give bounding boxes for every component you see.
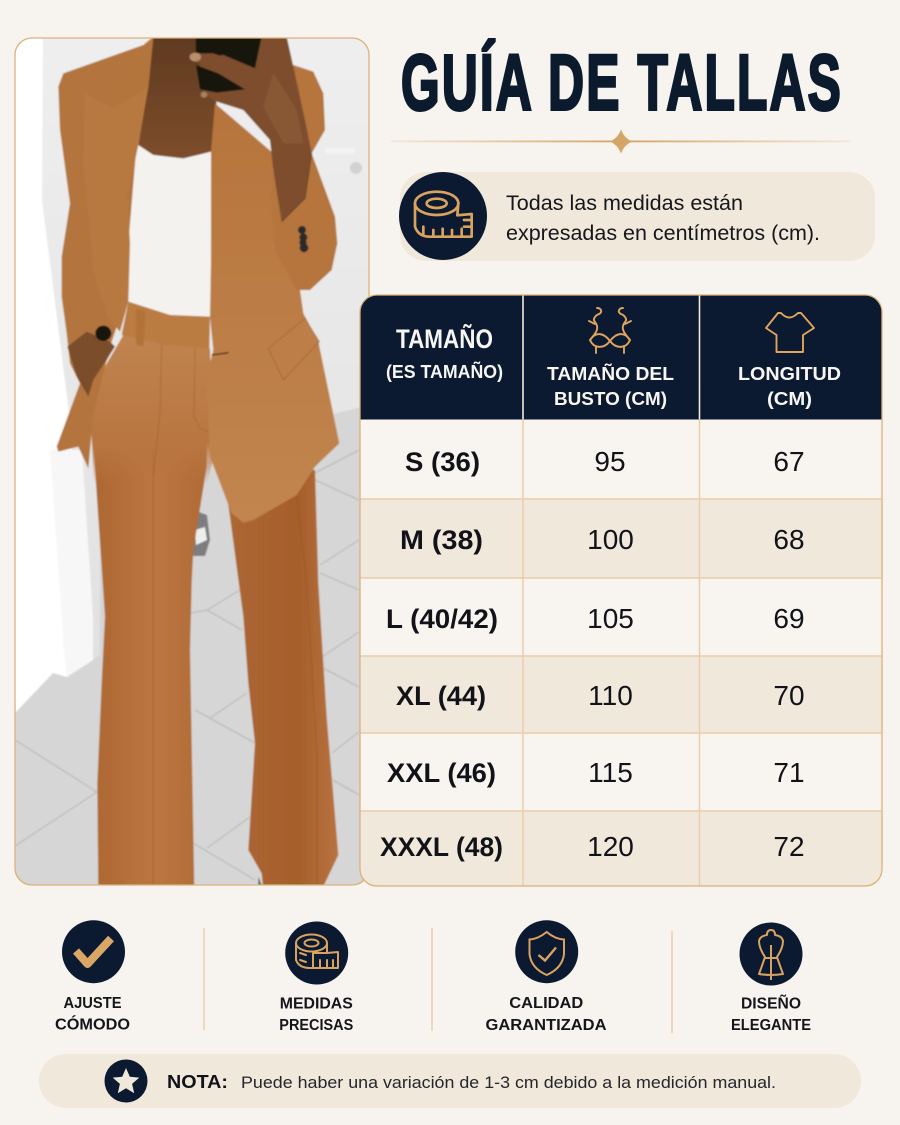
row S — [405, 446, 805, 477]
row L: 69 — [773, 603, 805, 634]
row XXL: 71 — [773, 757, 805, 788]
row M — [400, 524, 805, 555]
cuff buttons — [298, 226, 308, 252]
row XL — [396, 680, 805, 711]
callout text — [506, 192, 820, 245]
row S: 95 — [594, 446, 626, 477]
row S: 67 — [773, 446, 805, 477]
row XL: 70 — [773, 680, 805, 711]
right sleeve — [272, 65, 337, 290]
benefit: guaranteed quality — [486, 920, 606, 1034]
table rows — [380, 446, 805, 862]
benefit: comfortable fit — [55, 920, 130, 1034]
header: size column — [386, 323, 503, 382]
header: bust column — [547, 308, 674, 409]
header: length column: (CM) — [767, 388, 812, 409]
jacket right front — [207, 103, 339, 523]
benefit: elegant design — [731, 922, 811, 1034]
benefit: elegant design: DISEÑO — [741, 994, 801, 1012]
icon: tape measure — [399, 172, 487, 260]
row XXXL: XXXL (48) — [380, 832, 503, 862]
jacket left side — [57, 37, 153, 468]
header: size column: (ES TAMAÑO) — [386, 361, 503, 382]
header: length column: LONGITUD — [738, 363, 841, 384]
row L: 105 — [587, 603, 634, 634]
icon: star — [104, 1060, 148, 1102]
callout text: Todas las medidas están — [506, 192, 743, 215]
row L — [386, 603, 805, 634]
note text: NOTA: — [167, 1071, 228, 1092]
hand in pocket — [67, 332, 115, 397]
row XXXL: 72 — [773, 831, 805, 862]
row XXL: 115 — [588, 757, 633, 788]
row M: 68 — [773, 524, 805, 555]
hand holding phone — [197, 37, 312, 222]
row XXL: XXL (46) — [387, 758, 496, 788]
header: length column — [738, 313, 841, 409]
header: bust column: BUSTO (CM) — [554, 388, 667, 409]
header: bust column: TAMAÑO DEL — [547, 363, 674, 384]
upper trousers — [90, 335, 214, 484]
row XXXL — [380, 831, 805, 862]
row XL: 110 — [588, 680, 633, 711]
row S: S (36) — [405, 447, 480, 477]
row XL: XL (44) — [396, 681, 486, 711]
note bar — [39, 1054, 861, 1108]
header: size column: TAMAÑO — [396, 323, 493, 354]
callout: measurements in centimetres — [399, 172, 875, 261]
benefit: elegant design: ELEGANTE — [731, 1017, 811, 1034]
photo: model wearing a camel suit — [15, 37, 369, 890]
row M: 100 — [587, 524, 634, 555]
note bar: Puede haber una variación de 1-3 cm debido a la medición manual. — [241, 1074, 776, 1092]
benefit: comfortable fit: AJUSTE — [64, 995, 122, 1012]
icon: bra — [589, 308, 631, 353]
benefit: precise measurements: MEDIDAS — [280, 996, 353, 1012]
benefit: comfortable fit: CÓMODO — [55, 1016, 130, 1034]
decorative divider with diamond — [391, 130, 851, 154]
size table — [360, 295, 882, 886]
row M: M (38) — [400, 525, 483, 555]
benefit: precise measurements — [279, 922, 353, 1034]
benefit: precise measurements: PRECISAS — [279, 1017, 353, 1034]
benefit: guaranteed quality: CALIDAD — [509, 995, 583, 1012]
row XXXL: 120 — [587, 831, 634, 862]
row L: L (40/42) — [386, 604, 498, 634]
icon: t-shirt — [766, 313, 814, 352]
benefit: guaranteed quality: GARANTIZADA — [486, 1017, 606, 1034]
callout text: expresadas en centímetros (cm). — [506, 222, 820, 245]
row XXL — [387, 757, 805, 788]
